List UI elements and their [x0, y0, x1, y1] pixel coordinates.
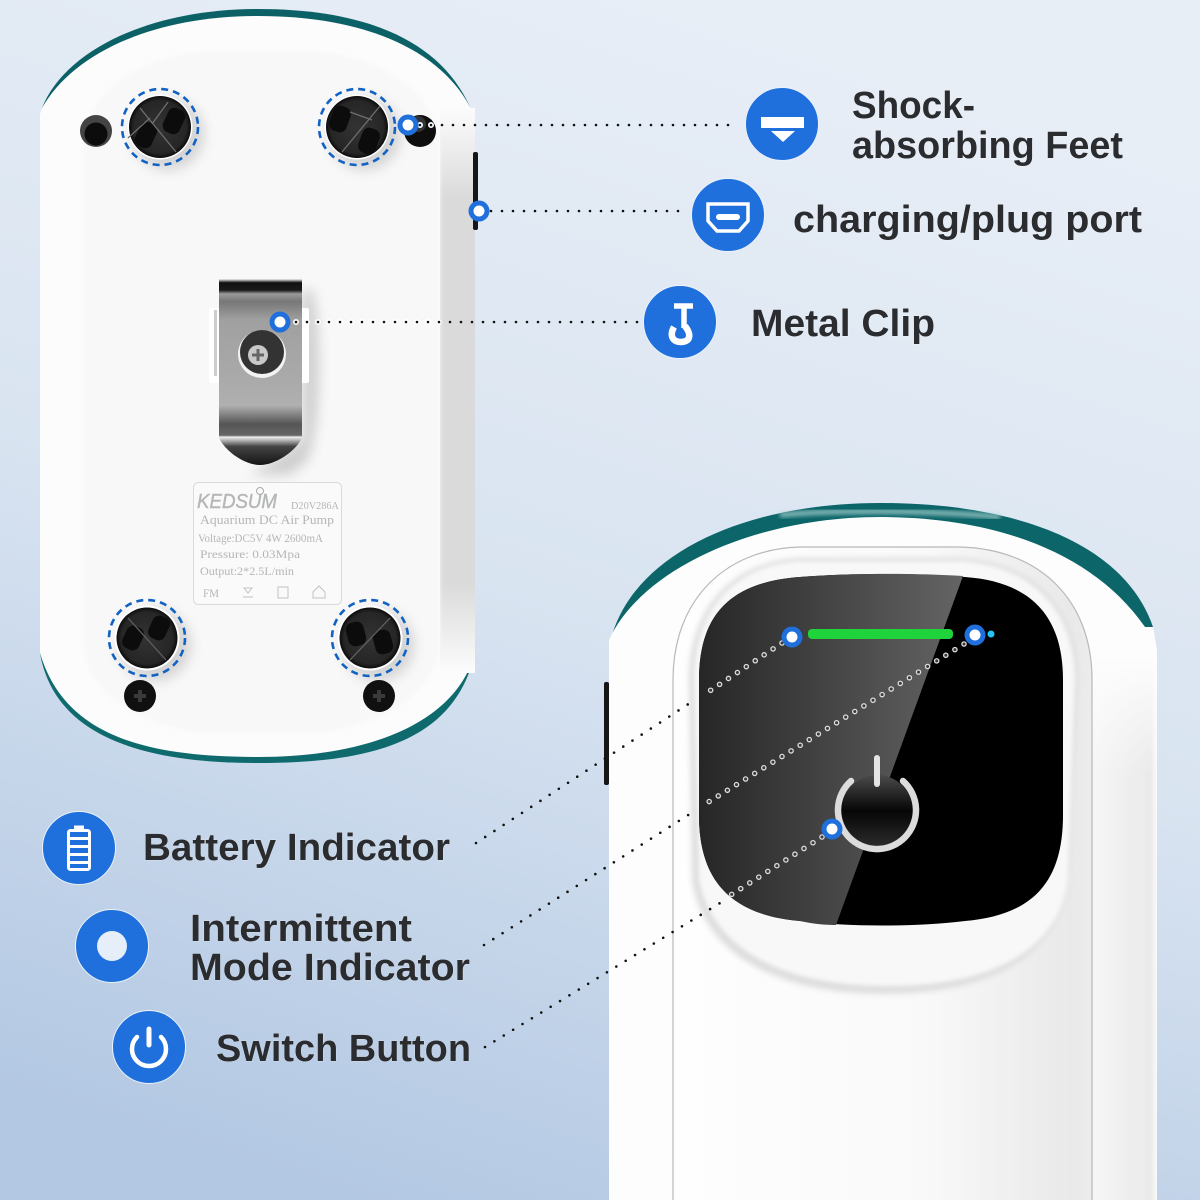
icon: power: [112, 1010, 186, 1084]
teal rim top: [42, 9, 470, 125]
product label: Voltage:DC5V 4W 2600mA: [198, 531, 323, 545]
product label: [194, 482, 342, 604]
panel: front of pump: [604, 503, 1157, 1200]
white body: [609, 517, 1157, 1200]
label: intermittent mode indicator: Mode Indicator: [190, 947, 470, 989]
product label: Aquarium DC Air Pump: [200, 512, 334, 527]
marker: feet: [398, 114, 418, 136]
icon: mode indicator: [76, 910, 148, 982]
product label: Pressure: 0.03Mpa: [200, 547, 301, 561]
cyan mode led: [988, 630, 994, 638]
teal rim: [613, 503, 1153, 645]
marker: clip: [270, 312, 290, 332]
panel: back of pump: [40, 9, 478, 763]
marker: switch: [822, 818, 842, 840]
black screen: [699, 574, 1063, 926]
label: shock-absorbing feet: absorbing Feet: [852, 125, 1123, 167]
marker: intermittent: [964, 624, 986, 646]
product label: FM: [203, 586, 219, 600]
product label: Output:2*2.5L/min: [200, 564, 294, 578]
screws: [80, 115, 436, 712]
foot: top left: [122, 89, 204, 170]
label: metal clip: Metal Clip: [751, 303, 935, 345]
raised centre: [83, 52, 440, 733]
label: charging port: charging/plug port: [793, 199, 1142, 241]
label: intermittent mode indicator: Intermittent: [190, 908, 412, 950]
screen recess: [689, 558, 1078, 994]
foot: bottom left: [109, 600, 191, 681]
green battery bar: [808, 629, 953, 639]
power button: [838, 755, 916, 849]
icon: charging port: [692, 178, 764, 252]
callout leaders: battery indicator: [476, 643, 782, 843]
right side fade: [1092, 655, 1157, 775]
teal rim bottom: [40, 640, 475, 763]
label: shock-absorbing feet: Shock-: [852, 85, 975, 127]
product label: D20V286A: [291, 500, 339, 512]
foot: top right: [319, 89, 401, 170]
rim highlight: [780, 511, 1000, 517]
side port: [473, 152, 478, 230]
label: switch button: Switch Button: [216, 1028, 471, 1070]
inner raised panel: [673, 547, 1092, 1200]
icon: shock-absorbing feet: [746, 88, 818, 160]
right side shading: [440, 108, 475, 673]
right side shading: [1092, 660, 1157, 1200]
metal clip: [209, 279, 319, 475]
callout leaders: switch button: [485, 837, 822, 1047]
icon: battery: [42, 812, 116, 884]
callout leaders: intermittent mode indicator: [484, 644, 964, 945]
glare: [699, 574, 963, 925]
side button: [604, 682, 609, 785]
white body: [40, 16, 475, 757]
foot: bottom right: [332, 600, 414, 681]
marker: battery: [782, 626, 802, 648]
label: battery indicator: Battery Indicator: [143, 827, 450, 869]
marker: port: [468, 200, 490, 222]
callout leaders: top: [296, 125, 735, 322]
icon: metal clip: [644, 286, 716, 358]
product label: KEDSUM: [197, 491, 277, 513]
